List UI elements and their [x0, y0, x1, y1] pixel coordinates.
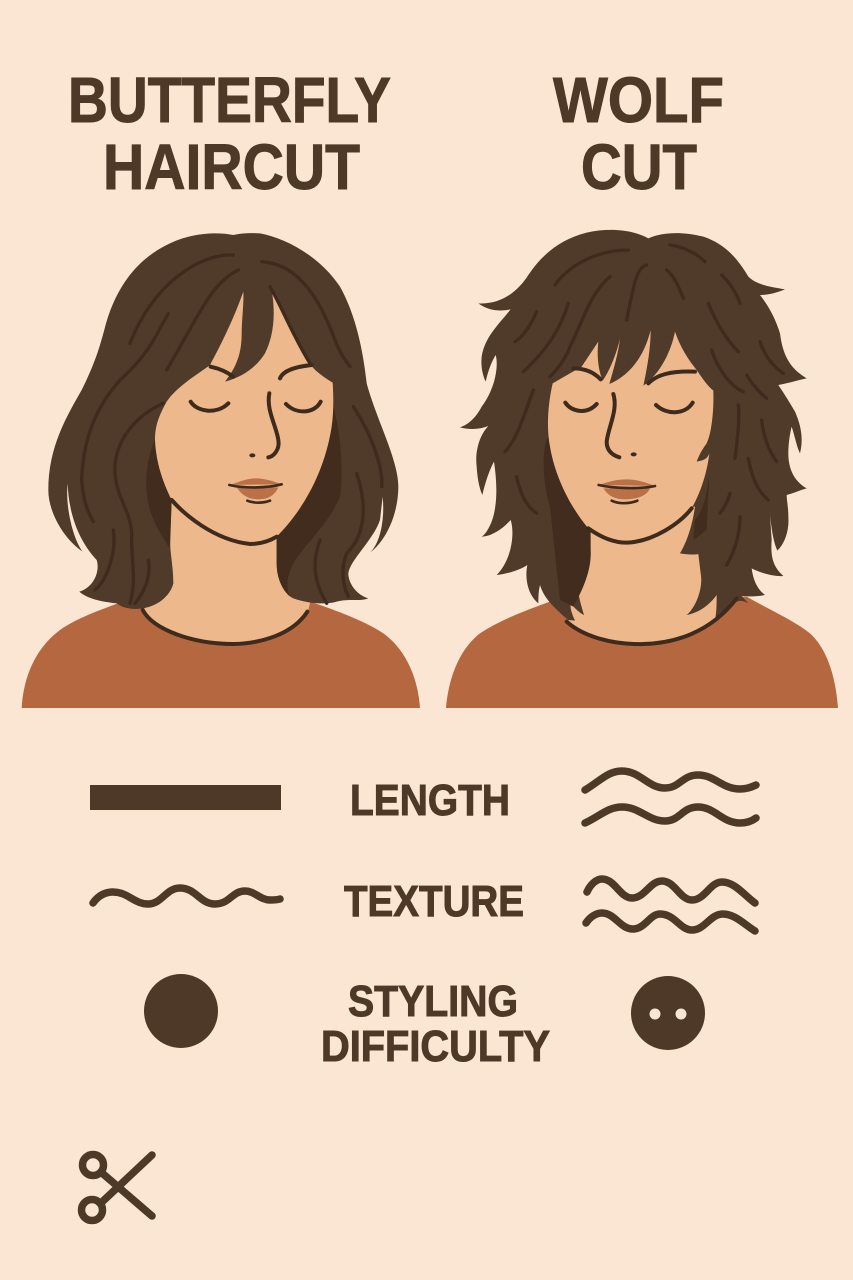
neck — [568, 503, 720, 644]
label: styling difficulty: STYLING — [348, 977, 518, 1026]
label: styling difficulty: DIFFICULTY — [321, 1022, 550, 1071]
hair strands — [505, 245, 783, 565]
title: wolf cut: WOLF — [553, 64, 724, 136]
eyes — [191, 402, 321, 411]
illustration: wolf cut portrait — [446, 230, 838, 708]
title: wolf cut: CUT — [581, 131, 697, 203]
hair shadow — [544, 433, 709, 607]
label: length: LENGTH — [350, 776, 510, 825]
row: texture — [93, 877, 755, 931]
lips — [229, 478, 282, 503]
nose — [607, 394, 637, 457]
row: length — [90, 771, 756, 825]
shirt — [22, 602, 420, 708]
hair strands — [82, 255, 382, 603]
illustration: butterfly haircut portrait — [22, 233, 420, 708]
face — [155, 285, 333, 545]
icon: solid circle — [144, 974, 218, 1048]
lips — [599, 479, 655, 503]
hair — [48, 233, 398, 609]
hair — [460, 230, 807, 621]
shirt — [446, 597, 838, 708]
title: butterfly haircut: BUTTERFLY — [68, 64, 391, 136]
neck — [143, 497, 311, 645]
eyebrows — [211, 365, 312, 378]
icon: tight waves — [586, 879, 755, 931]
icon: scissors — [82, 1154, 152, 1220]
label: styling difficulty — [321, 977, 550, 1071]
eyebrows — [573, 368, 695, 383]
hair shadow — [146, 407, 342, 597]
label: texture: TEXTURE — [344, 877, 524, 926]
face — [548, 330, 713, 543]
icon: long waves — [585, 771, 756, 823]
icon: straight bar — [90, 785, 281, 810]
icon: button circle — [631, 976, 705, 1050]
eyes — [565, 403, 693, 412]
icon: soft wave — [93, 888, 280, 904]
nose — [249, 393, 279, 457]
title: butterfly haircut — [68, 64, 391, 203]
row: styling difficulty — [144, 974, 705, 1071]
title: butterfly haircut: HAIRCUT — [103, 131, 360, 203]
jaw and collar lines — [143, 500, 307, 644]
title: wolf cut — [553, 64, 724, 203]
jaw and collar lines — [567, 508, 737, 644]
